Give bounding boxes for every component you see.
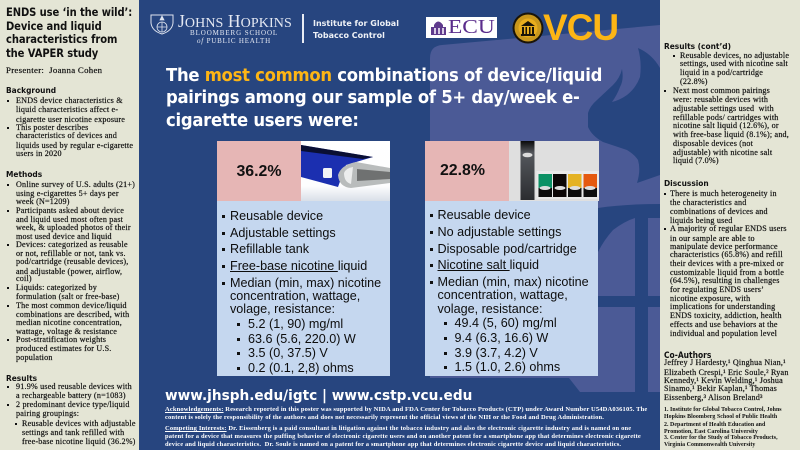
list: device and liquid characteristics: 1.5 (1.0, 2.6) ohms: [454, 360, 560, 374]
text: results bullets: 91.9% used reusable devices with: [16, 382, 132, 391]
text: results continued bullets: adjustable) with nicotine salt: [673, 148, 772, 156]
text: co-author names: Eissenberg,³ Alison Breland³: [664, 393, 763, 402]
text: background bullets: This poster describes: [16, 122, 89, 132]
headline: The most common combinations of device/liquid: [166, 66, 602, 86]
list: device and liquid characteristics: 0.2 (0.1, 2,8) ohms: [248, 361, 354, 375]
competing interests: patent for a device that measures the puffing behavior of electronic cigarette users and on another patent for a smartphone app that determines electronic cigarette: [165, 432, 641, 440]
text: results continued bullets: disposable devices (not: [673, 138, 753, 148]
text: methods bullets: Participants asked about device: [16, 206, 124, 214]
icon: refillable tank device photo: [301, 141, 390, 201]
list: device and liquid characteristics: volage, resistance:: [230, 302, 335, 316]
text: methods bullets: population: [16, 353, 53, 362]
text: results continued bullets: liquid in a pod/cartridge: [680, 68, 763, 76]
panel: left column: [0, 0, 139, 450]
text: results bullets: Reusable devices with adjustable: [22, 419, 136, 428]
heading: results: Results: [6, 373, 37, 383]
headline: cigarette users were:: [166, 111, 359, 131]
logo: ECU: [426, 17, 497, 38]
text: methods bullets: using e-cigarettes 5+ days per: [16, 188, 119, 198]
logo: Institute for Global Tobacco Control: [313, 19, 399, 40]
text: results continued bullets: with free-base liquid (8.1%); and,: [673, 130, 789, 138]
stat: 36.2%: 36.2%: [236, 163, 282, 180]
text: methods bullets: median nicotine concentration,: [16, 318, 122, 327]
list: device and liquid characteristics: [222, 208, 381, 375]
website links: www.jhsph.edu/igtc | www.cstp.vcu.edu: [165, 387, 472, 404]
text: methods bullets: Online survey of U.S. adults (21+): [16, 180, 135, 188]
text: discussion bullets: their devices with a pre-mixed or: [670, 259, 784, 268]
text: results continued bullets: liquid (7.0%): [673, 156, 719, 165]
logo: Johns Hopkins Bloomberg School: of PUBLIC HEALTH: [197, 37, 271, 45]
competing interests: device and liquid characteristics. Dr. Soule is named on a patent for a smartphone app that determines electronic cigarette device and liquid characteristics.: [165, 440, 621, 448]
logo: Johns Hopkins Bloomberg School: JOHNS HOPKINS: [178, 11, 292, 31]
text: discussion bullets: manipulate device performance: [670, 242, 778, 251]
list: device and liquid characteristics: No adjustable settings: [438, 225, 561, 239]
panel: right column: [660, 0, 800, 450]
text: methods bullets: and liquid used most often past: [16, 214, 123, 224]
list: device and liquid characteristics: [430, 208, 589, 374]
list: device and liquid characteristics: 49.4 (5, 60) mg/ml: [454, 316, 557, 330]
text: discussion bullets: effects and use behaviors at the: [670, 320, 778, 328]
logo: Institute for Global Tobacco Control: Institute for Global: [313, 19, 399, 28]
text: results bullets: settings and tank refilled with: [22, 428, 124, 436]
heading: co-authors: Co-Authors: [664, 350, 711, 360]
text: results continued bullets: [664, 50, 789, 166]
text: results continued bullets: Next most common pairings: [673, 86, 770, 95]
title: ENDS use ‘in the wild’:: [6, 5, 132, 19]
list: device and liquid characteristics: 63.6 (5.6, 220.0) W: [248, 332, 356, 346]
list: device and liquid characteristics: 5.2 (1, 90) mg/ml: [248, 317, 343, 331]
logo: VCU wordmark: VCU: [543, 7, 618, 48]
text: methods bullets: week, & uploaded photos of their: [16, 223, 131, 232]
text: results continued bullets: were: reusable devices with: [673, 95, 768, 104]
text: methods bullets: most used device and liquid: [16, 232, 112, 240]
heading: discussion: Discussion: [664, 178, 709, 188]
list: device and liquid characteristics: 9.4 (6.3, 16.6) W: [454, 331, 548, 345]
text: results continued bullets: Reusable devices, no adjustable: [680, 50, 789, 60]
stat: 36.2%: [217, 141, 301, 201]
list: device and liquid characteristics: Reusable device: [230, 208, 323, 222]
text: discussion bullets: in our sample are able to: [670, 234, 755, 242]
text: discussion bullets: for regulating ENDS users’: [670, 285, 764, 294]
text: background bullets: [7, 96, 133, 158]
text: discussion bullets: (64.5%), resulting in challenges: [670, 276, 780, 285]
text: results continued bullets: refillable pods/ cartridges with: [673, 112, 779, 122]
list: device and liquid characteristics: Refillable tank: [230, 242, 309, 256]
text: methods bullets: Devices: categorized as reusable: [16, 240, 128, 249]
text: background bullets: cigarette user nicotine exposure: [16, 114, 125, 124]
text: discussion bullets: There is much heterogeneity in: [670, 189, 777, 198]
text: co-author names: Kennedy,¹ Kevin Welding,¹ Joshua: [664, 376, 783, 384]
text: affiliations: 2. Department of Health Education and: [664, 422, 765, 428]
text: affiliations: Virginia Commonwealth University: [664, 442, 755, 448]
text: discussion bullets: characteristics (65.8%) and refill: [670, 250, 783, 259]
text: discussion bullets: individual and population level: [670, 328, 777, 338]
text: methods bullets: week (N=1209): [16, 196, 70, 206]
text: methods bullets: Liquids: categorized by: [16, 283, 97, 292]
competing interests: [165, 425, 641, 448]
divider: [302, 14, 304, 43]
list: device and liquid characteristics: 3.5 (0, 37.5) V: [248, 346, 328, 360]
text: methods bullets: The most common device/liquid: [16, 300, 127, 310]
icon: pod device and coloured pods photo: [509, 141, 599, 201]
text: methods bullets: pod/cartridge (reusable devices),: [16, 257, 128, 266]
text: affiliations: 1. Institute for Global Tobacco Control, Johns: [664, 407, 782, 413]
heading: results continued: Results (cont’d): [664, 41, 731, 51]
text: methods bullets: produced estimates for U.S.: [16, 344, 112, 353]
list: device and liquid characteristics: Median (min, max) nicotine: [230, 276, 381, 290]
title: Device and liquid: [6, 19, 102, 33]
text: methods bullets: formulation (salt or free-base): [16, 292, 120, 301]
text: background bullets: ENDS device characteristics &: [16, 96, 123, 105]
logo: Johns Hopkins Bloomberg School: [150, 11, 292, 45]
text: results continued bullets: (22.8%): [680, 76, 708, 86]
list: device and liquid characteristics: Adjustable settings: [230, 226, 336, 240]
list: device and liquid characteristics: Nicotine salt liquid: [438, 258, 539, 272]
text: discussion bullets: A majority of regular ENDS users: [670, 224, 787, 233]
list: device and liquid characteristics: volage, resistance:: [438, 302, 543, 316]
text: discussion bullets: liquids being used: [670, 216, 733, 224]
text: discussion bullets: [664, 189, 787, 338]
text: affiliations: [664, 406, 782, 448]
presenter: Presenter: Joanna Cohen: [6, 65, 102, 75]
text: discussion bullets: ENDS toxicity, addiction, health: [670, 311, 782, 320]
competing interests: Competing Interests: Dr. Eissenberg is a paid consultant in litigation against the tobacco industry and also the electronic cigarette industry and is named on one: [165, 425, 631, 432]
icon: university shield: [150, 14, 174, 34]
text: affiliations: 3. Center for the Study of Tobacco Products,: [664, 435, 778, 441]
list: device and liquid characteristics: concentration, wattage,: [438, 288, 568, 302]
text: discussion bullets: nicotine exposure, with: [670, 294, 750, 303]
text: background bullets: liquid characteristics affect e-: [16, 105, 118, 114]
title: the VAPER study: [6, 46, 98, 60]
panel: center background: [430, 25, 660, 392]
text: methods bullets: [7, 180, 135, 362]
list: device and liquid characteristics: 3.9 (3.7, 4.2) V: [454, 346, 538, 360]
text: affiliations: Promotion, East Carolina University: [664, 428, 758, 434]
acknowledgements: Acknowledgements: Research reported in this poster was supported by NIDA and FDA Center for Tobacco Products (CTP) under Award Number U54DA036105. The: [165, 406, 647, 413]
text: co-author names: Elizabeth Crespi,¹ Eric Soule,² Ryan: [664, 368, 789, 376]
text: discussion bullets: combinations of devices and: [670, 207, 768, 216]
text: co-author names: [664, 358, 789, 402]
title: characteristics from: [6, 32, 117, 46]
text: results continued bullets: settings, used with nicotine salt: [680, 59, 788, 68]
headline: [166, 66, 602, 131]
text: results bullets: 2 predominant device type/liquid: [16, 400, 130, 409]
text: methods bullets: combinations are described, with: [16, 310, 129, 318]
text: affiliations: Hopkins Bloomberg School of Public Health: [664, 414, 777, 420]
text: results bullets: pairing groupings:: [16, 409, 79, 418]
text: results bullets: [7, 382, 136, 446]
text: methods bullets: or not, refillable or not, tank vs.: [16, 248, 126, 258]
logo: Johns Hopkins Bloomberg School: BLOOMBERG SCHOOL: [190, 29, 278, 37]
heading: background: Background: [6, 85, 56, 95]
text: background bullets: liquids used by regular e-cigarette: [16, 140, 133, 150]
acknowledgements: content is solely the responsibility of the authors and does not necessarily represent the official views of the NIH or the Food and Drug Administration.: [165, 414, 604, 421]
text: results continued bullets: adjustable settings used with: [673, 104, 774, 112]
text: discussion bullets: implications for understanding: [670, 302, 775, 311]
text: results bullets: free-base nicotine liquid (36.2%): [22, 436, 136, 446]
list: device and liquid characteristics: Disposable pod/cartridge: [438, 242, 577, 256]
text: methods bullets: coil): [16, 274, 32, 283]
text: background bullets: users in 2020: [16, 149, 62, 158]
panel: pairing 36.2%: [217, 141, 390, 376]
panel: pairing 22.8%: [424, 141, 598, 376]
headline: pairings among our sample of 5+ day/week e-: [166, 88, 579, 108]
stat: 22.8%: 22.8%: [440, 162, 485, 179]
text: methods bullets: Post-stratification weights: [16, 335, 106, 344]
acknowledgements: [165, 406, 648, 421]
list: device and liquid characteristics: concentration, wattage,: [230, 289, 360, 303]
list: device and liquid characteristics: Free-base nicotine liquid: [230, 258, 367, 272]
heading: methods: Methods: [6, 169, 42, 179]
list: device and liquid characteristics: Reusable device: [438, 208, 531, 222]
text: background bullets: characteristics of devices and: [16, 131, 117, 140]
stat: 22.8%: [424, 141, 508, 201]
text: discussion bullets: customizable liquid from a bottle: [670, 268, 784, 276]
text: co-author names: Jeffrey J Hardesty,¹ Qinghua Nian,¹: [664, 358, 786, 367]
text: results continued bullets: nicotine salt liquid (12.6%), or: [673, 121, 779, 130]
text: results bullets: a rechargeable battery (n=1083): [16, 391, 126, 400]
logo: VCU seal: [512, 12, 544, 44]
text: co-author names: Sinamo,¹ Bekir Kaplan,¹ Thomas: [664, 384, 777, 392]
text: discussion bullets: the characteristics and: [670, 198, 747, 207]
logo: Institute for Global Tobacco Control: Tobacco Control: [313, 30, 385, 40]
list: device and liquid characteristics: Median (min, max) nicotine: [438, 275, 589, 289]
text: methods bullets: wattage, voltage & resistance: [16, 327, 117, 336]
text: methods bullets: and adjustable (power, airflow,: [16, 266, 122, 276]
title: [6, 5, 132, 60]
